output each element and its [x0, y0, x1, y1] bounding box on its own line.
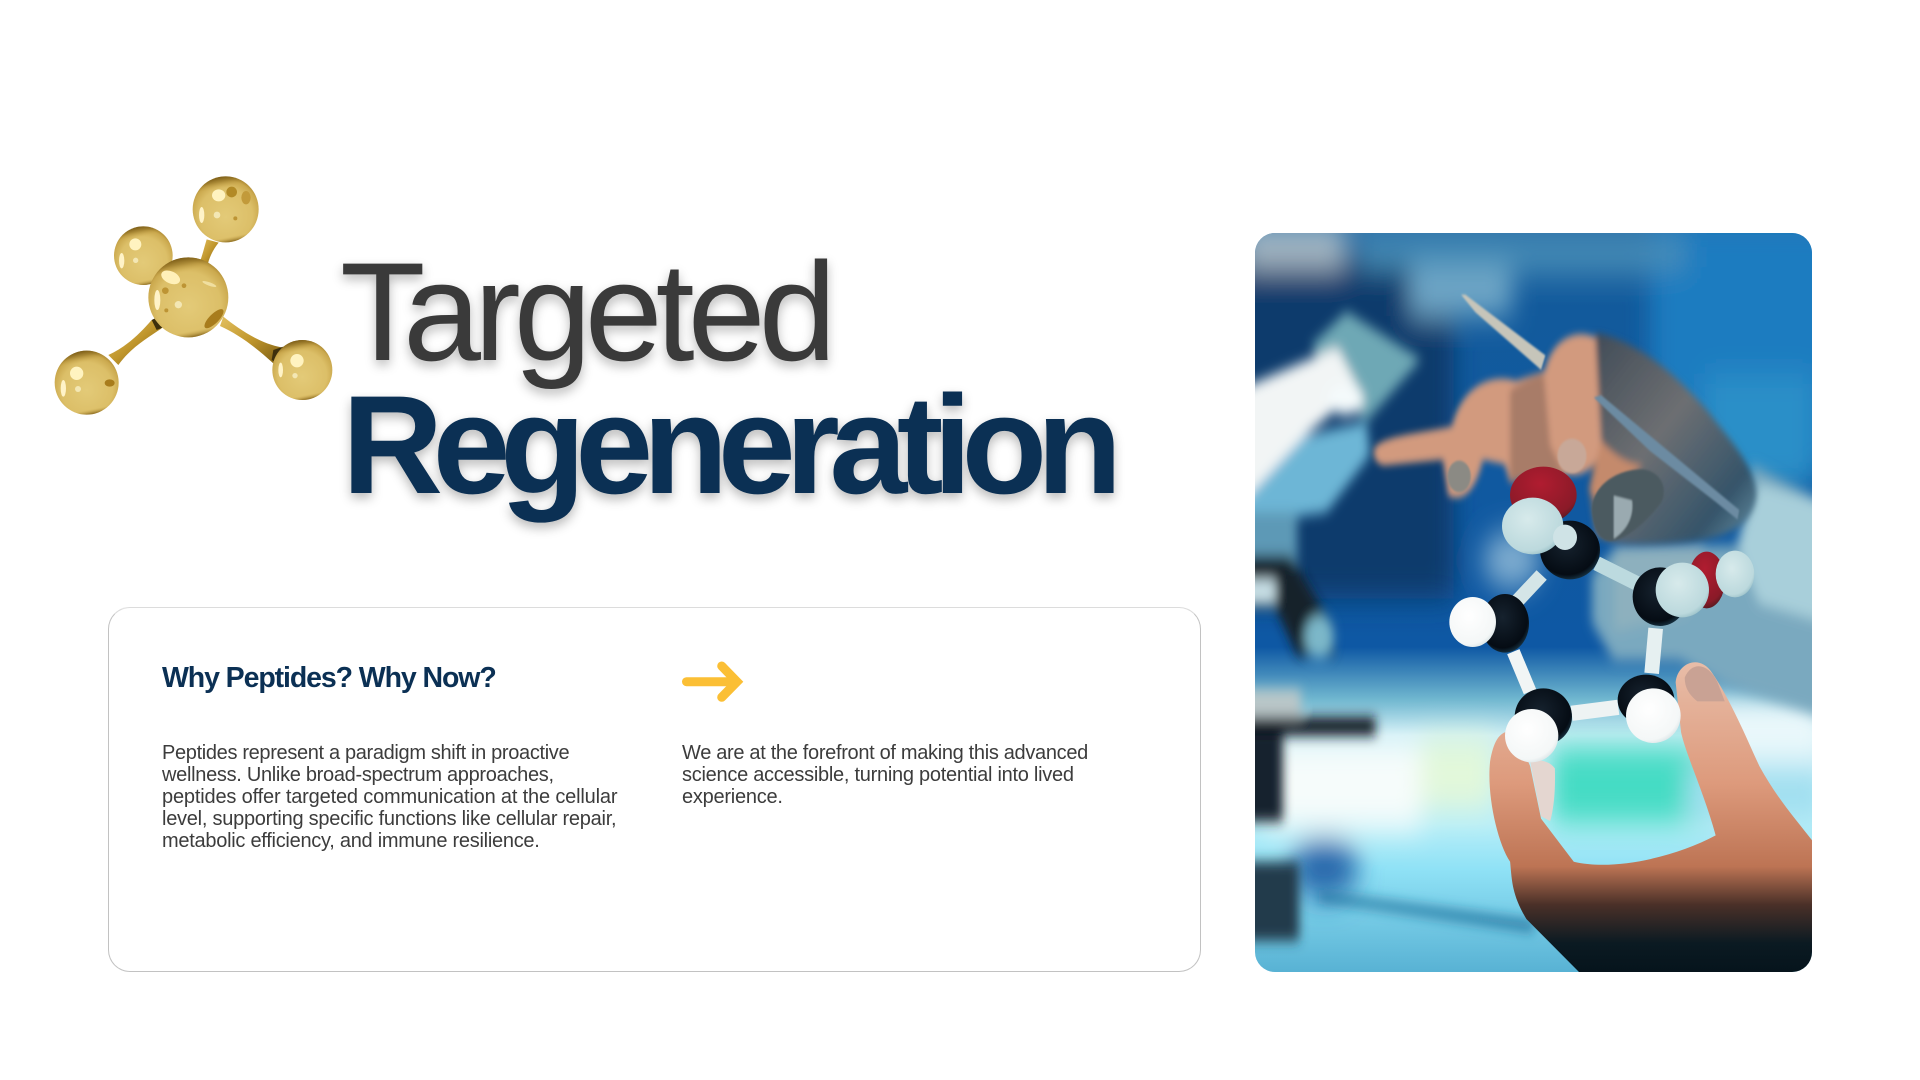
text: right column: experience. [682, 786, 783, 808]
atoms: bottom left carbon [1505, 688, 1572, 762]
ball: bottom left [55, 351, 119, 415]
heading: why peptides: Why Peptides? Why Now? [162, 662, 496, 694]
microscope [1243, 311, 1534, 941]
icon: yellow arrow [682, 662, 744, 702]
atoms: top carbon and hydroxyl [1502, 467, 1600, 579]
atoms: left carbon [1449, 594, 1529, 653]
background: blurred lab [1255, 233, 1812, 972]
ball: top [193, 176, 259, 242]
photo: hands holding molecular model [1255, 233, 1812, 972]
text: left column: metabolic efficiency, and immune resilience. [162, 830, 540, 852]
atoms: right carbon and hydroxyl [1633, 551, 1754, 626]
ball: left [114, 226, 173, 285]
icon: golden molecule [54, 176, 332, 415]
text: left column: wellness. Unlike broad-spectrum approaches, [162, 764, 554, 786]
text: right column: We are at the forefront of making this advanced [682, 742, 1088, 764]
title: Targeted: Targeted [340, 232, 830, 390]
lower hand [1489, 662, 1818, 981]
bonds [108, 239, 283, 365]
text: right column: science accessible, turning potential into lived [682, 764, 1074, 786]
atoms: bottom right carbon [1618, 675, 1681, 743]
text: left column: Peptides represent a paradigm shift in proactive [162, 742, 569, 764]
pen [1461, 295, 1739, 520]
molecular model [1449, 467, 1754, 762]
ball: centre [148, 257, 228, 337]
title: Regeneration: Regeneration [342, 366, 1112, 522]
text: right column [682, 742, 1088, 808]
upper hand [1374, 333, 1756, 544]
fingernails and thumb [1448, 439, 1664, 541]
lab coat sleeve [1592, 465, 1825, 718]
stick bonds [1513, 563, 1656, 713]
text: left column: level, supporting specific functions like cellular repair, [162, 808, 616, 830]
ball: right [272, 340, 332, 400]
text: left column [162, 742, 618, 852]
panel: why peptides card [108, 607, 1201, 972]
text: left column: peptides offer targeted communication at the cellular [162, 786, 617, 808]
